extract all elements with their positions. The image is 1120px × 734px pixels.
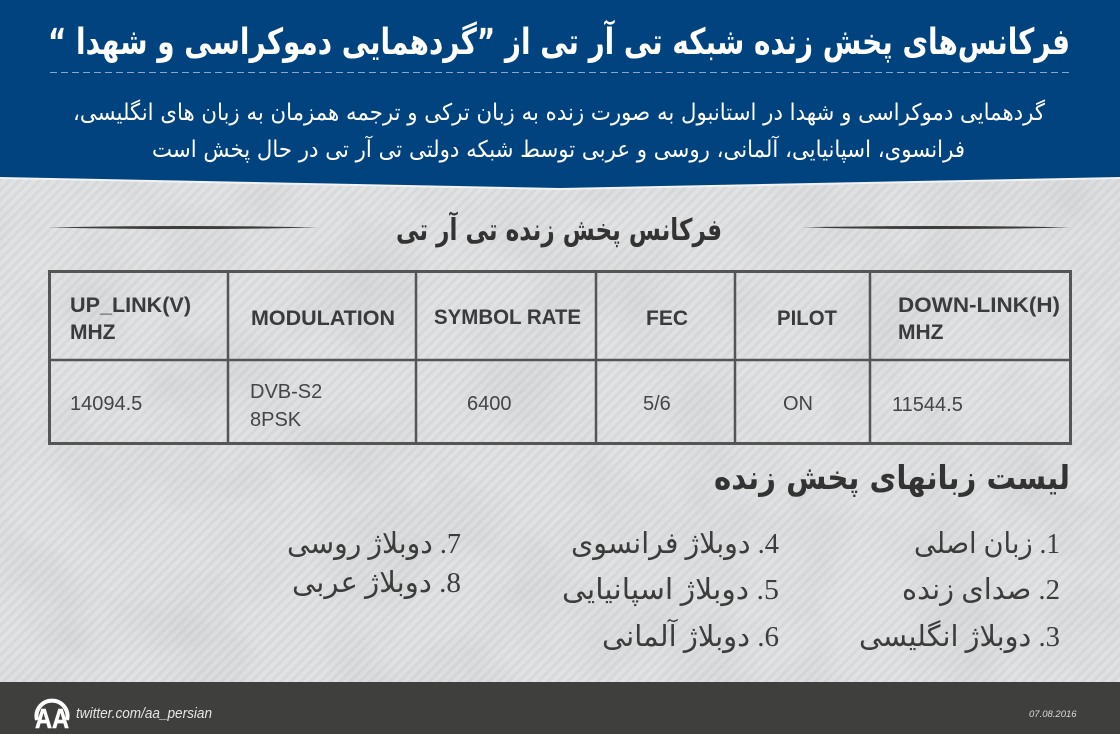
column: symbol rate bbox=[434, 306, 581, 415]
footer bbox=[0, 682, 1120, 734]
language list column 1: 2. صدای زنده bbox=[902, 574, 1060, 606]
column: symbol rate: 6400 bbox=[467, 393, 512, 415]
intro line 1: گردهمایی دموکراسی و شهدا در استانبول به صورت زنده به زبان ترکی و ترجمه همزمان به زبان های انگلیسی، bbox=[73, 99, 1045, 126]
column: uplink: UP_LINK(V) bbox=[70, 294, 191, 317]
language list column 2 bbox=[562, 528, 779, 653]
icon: AA logo: AA bbox=[35, 703, 69, 734]
language list column 1: 3. دوبلاژ انگلیسی bbox=[859, 620, 1060, 653]
column: downlink: DOWN-LINK(H) bbox=[898, 294, 1060, 317]
date: 07.08.2016 bbox=[1029, 709, 1077, 720]
language list column 3: 8. دوبلاژ عربی bbox=[292, 567, 461, 599]
column: downlink bbox=[892, 294, 1060, 416]
column: downlink: 11544.5 bbox=[892, 394, 963, 416]
languages heading: لیست زبانهای پخش زنده bbox=[714, 458, 1070, 498]
language list column 1 bbox=[859, 528, 1060, 653]
language list column 3: 7. دوبلاژ روسی bbox=[287, 528, 461, 560]
column: modulation: 8PSK bbox=[250, 409, 302, 431]
column: uplink bbox=[70, 294, 191, 415]
column: fec: FEC bbox=[646, 307, 688, 330]
column: uplink: 14094.5 bbox=[70, 393, 142, 415]
column: pilot: ON bbox=[783, 393, 813, 415]
language list column 2: 6. دوبلاژ آلمانی bbox=[602, 618, 779, 653]
column: downlink: MHZ bbox=[898, 321, 944, 344]
header band bbox=[0, 0, 1120, 189]
column: fec bbox=[643, 307, 688, 415]
column: uplink: MHZ bbox=[70, 321, 116, 344]
column: pilot bbox=[777, 307, 837, 415]
column: fec: 5/6 bbox=[643, 393, 671, 415]
column: modulation: MODULATION bbox=[251, 307, 395, 330]
language list column 2: 5. دوبلاژ اسپانیایی bbox=[562, 574, 779, 607]
language list column 1: 1. زبان اصلی bbox=[914, 528, 1060, 560]
twitter handle: twitter.com/aa_persian bbox=[76, 706, 212, 722]
column: modulation bbox=[250, 307, 395, 431]
section heading: فرکانس پخش زنده تی آر تی bbox=[396, 211, 722, 248]
section heading bbox=[48, 211, 1070, 248]
column: modulation: DVB-S2 bbox=[250, 381, 322, 403]
column: symbol rate: SYMBOL RATE bbox=[434, 306, 581, 329]
language list column 2: 4. دوبلاژ فرانسوی bbox=[571, 528, 779, 560]
intro line 2: فرانسوی، اسپانیایی، آلمانی، روسی و عربی توسط شبکه دولتی تی آر تی در حال پخش است bbox=[152, 135, 965, 163]
column: pilot: PILOT bbox=[777, 307, 837, 330]
frequency table bbox=[49, 271, 1071, 444]
language list column 3 bbox=[287, 528, 461, 599]
